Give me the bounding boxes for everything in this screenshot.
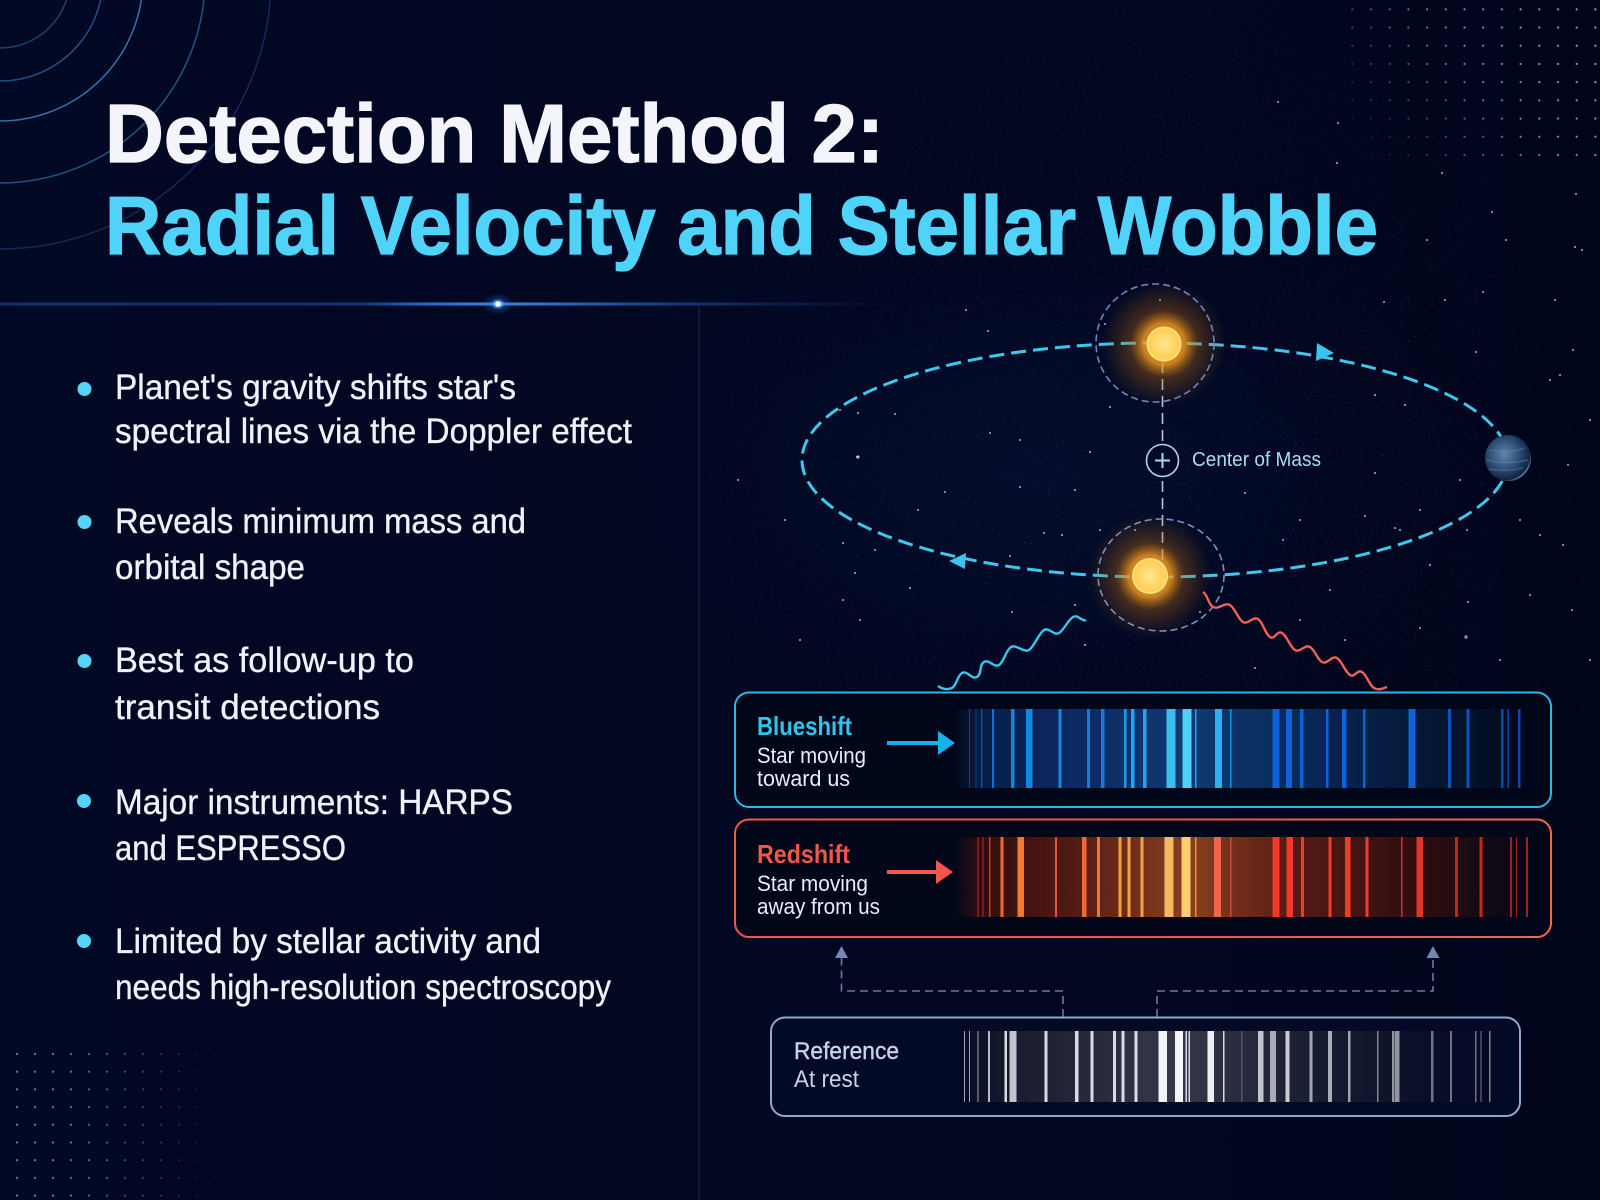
bullet 3: transit detections bbox=[115, 688, 380, 727]
star field bbox=[700, 0, 1600, 720]
bullet 3 bbox=[78, 641, 414, 727]
bullet 5: Limited by stellar activity and bbox=[115, 922, 541, 961]
reference label bbox=[794, 1038, 899, 1093]
redshift spectrum bbox=[955, 837, 1537, 917]
redshift label: away from us bbox=[757, 894, 880, 919]
bullet 2 bbox=[78, 502, 526, 587]
orbit diagram bbox=[802, 282, 1531, 689]
bullet 2: Reveals minimum mass and bbox=[115, 502, 526, 541]
center of mass label: Center of Mass bbox=[1192, 449, 1321, 471]
blueshift spectrum bbox=[955, 709, 1537, 788]
planet bbox=[1485, 435, 1531, 481]
blueshift arrow bbox=[887, 731, 955, 755]
panel: redshift bbox=[735, 820, 1551, 937]
bullet 1: Planet's gravity shifts star's bbox=[115, 368, 516, 407]
redshift arrow bbox=[887, 860, 953, 884]
panel: reference spectrum bbox=[771, 1018, 1520, 1116]
decorative dot grid bottom left bbox=[0, 1052, 216, 1197]
orbit direction arrow left bbox=[949, 553, 966, 569]
bullet list bbox=[77, 368, 632, 1007]
redshift light wave bbox=[1203, 592, 1387, 689]
redshift label: Redshift bbox=[757, 839, 850, 869]
title line 1: Detection Method 2: bbox=[105, 87, 884, 180]
bullet 1 bbox=[78, 368, 632, 451]
bullet 3: Best as follow-up to bbox=[115, 641, 414, 680]
title bbox=[105, 87, 1378, 272]
reference connector left bbox=[835, 946, 1063, 1017]
redshift label: Star moving bbox=[757, 871, 868, 896]
orbital path bbox=[802, 343, 1508, 577]
panel divider bbox=[698, 306, 700, 1200]
center of mass marker bbox=[1146, 444, 1178, 476]
bullet 4: Major instruments: HARPS bbox=[115, 783, 513, 822]
bullet 1: spectral lines via the Doppler effect bbox=[115, 412, 632, 451]
bullet 2: orbital shape bbox=[115, 548, 305, 587]
center of mass axis bbox=[1162, 362, 1164, 570]
blueshift label: toward us bbox=[757, 766, 850, 791]
reference connector right bbox=[1157, 946, 1440, 1017]
blueshift light wave bbox=[938, 616, 1086, 689]
redshift label bbox=[757, 839, 880, 919]
star lower position bbox=[1088, 514, 1224, 638]
bullet 4 bbox=[77, 783, 513, 868]
bullet 5: needs high-resolution spectroscopy bbox=[115, 968, 611, 1007]
blueshift label: Blueshift bbox=[757, 711, 852, 741]
reference spectrum lines bbox=[960, 1031, 1495, 1102]
orbit direction arrow right bbox=[1316, 343, 1334, 361]
title divider with spark bbox=[0, 293, 900, 315]
bullet 4: and ESPRESSO bbox=[115, 829, 346, 868]
blueshift label: Star moving bbox=[757, 743, 866, 768]
panel: blueshift bbox=[735, 692, 1551, 807]
reference label: Reference bbox=[794, 1038, 899, 1065]
star upper position bbox=[1096, 282, 1226, 406]
decorative dot grid top right bbox=[1351, 8, 1597, 156]
title line 2: Radial Velocity and Stellar Wobble bbox=[105, 179, 1378, 272]
reference label: At rest bbox=[794, 1066, 859, 1093]
concentric arcs decoration bbox=[0, 0, 271, 249]
bullet 5 bbox=[77, 922, 611, 1007]
blueshift label bbox=[757, 711, 866, 791]
